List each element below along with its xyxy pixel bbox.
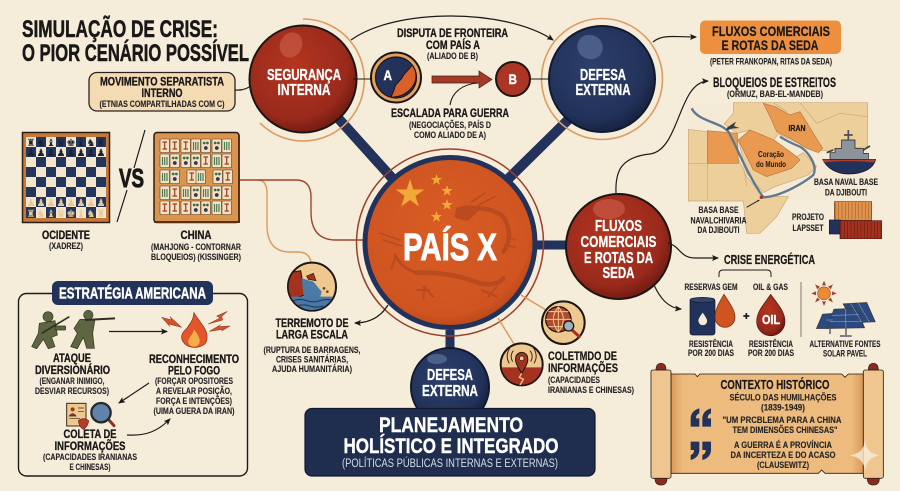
- icon: globo: [542, 301, 585, 344]
- node: fluxos comerciais: E ROTAS DA: [584, 250, 653, 267]
- text: terremoto: (RUPTURA DE BARRAGENS,: [264, 345, 360, 355]
- icon: document and magnifier: [67, 403, 114, 429]
- icon: sun and solar panels: [811, 281, 875, 336]
- mahjong board: [154, 132, 239, 222]
- map labels: PROJETO: [792, 212, 824, 222]
- containers: [829, 202, 882, 239]
- text: escalada para guerra: COMO ALIADO DE A): [414, 130, 486, 140]
- map labels: LAPSSET: [792, 223, 824, 233]
- callout: movimento separatista: INTERNO: [142, 88, 183, 100]
- scroll: contexto histórico: CONTEXTO HISTÓRICO: [720, 377, 830, 392]
- text: reconhecimento pelo fogo: RECONHECIMENTO: [149, 354, 239, 366]
- arrow: fluxos to reservas: [654, 285, 681, 309]
- text: coleta de informações: INFORMAÇÕES: [548, 360, 618, 375]
- node: fluxos comerciais: COMERCIAIS: [580, 234, 657, 251]
- arrow: reconhecimento to coleta: [119, 383, 149, 403]
- text: coleta de informações: [548, 349, 634, 395]
- text: ataque diversionário: DESVIAR RECURSOS): [35, 386, 109, 396]
- text: reconhecimento pelo fogo: (UIMA GUERA DA IRAN): [154, 406, 235, 416]
- icon: soldiers: [32, 310, 115, 349]
- node: fluxos comerciais: [566, 194, 671, 299]
- energy reserves: POR 200 DIAS: [748, 348, 794, 358]
- text: coleta de informações: COLETMDO DE: [548, 349, 617, 363]
- panel: estratégia americana: [18, 281, 248, 476]
- text: reconhecimento pelo fogo: FORÇA E INTENÇÕES): [156, 396, 232, 406]
- node: fluxos comerciais: SEDA: [602, 265, 635, 282]
- label: china: BLOQUEIOS) (KISSINGER): [151, 252, 241, 262]
- map labels: BASA BASE: [698, 205, 739, 215]
- text: disputa de fronteira: [397, 28, 508, 61]
- text: coleta de informações panel: INFORMAÇÕES: [54, 440, 126, 453]
- map: middle east: [688, 103, 882, 239]
- text: ataque diversionário: ATAQUE: [53, 353, 91, 365]
- label: ocidente: [42, 230, 90, 251]
- text: bloqueios de estreitos: (ORMUZ, BAB-EL-MANDEB): [727, 89, 823, 99]
- text: terremoto: CRISES SANITÁRIAS,: [276, 354, 348, 364]
- text: reconhecimento pelo fogo: [149, 354, 239, 416]
- text: escalada para guerra: ESCALADA PARA GUERRA: [391, 108, 509, 120]
- text: coleta de informações panel: COLETA DE: [64, 429, 117, 441]
- text: terremoto: TERREMOTO DE: [276, 318, 349, 330]
- banner: planejamento holístico: (POLÍTICAS PÚBLICAS INTERNAS E EXTERNAS): [342, 457, 558, 470]
- icon: terremoto barragem: [287, 263, 340, 313]
- energy reserves: [684, 270, 801, 358]
- text: terremoto: AJUDA HUMANITÁRIA): [272, 364, 352, 374]
- central node: país x: [356, 149, 544, 336]
- title: O PIOR CENÁRIO POSSÍVEL: [22, 39, 249, 67]
- heading badge: [52, 281, 213, 305]
- text: disputa de fronteira: COM PAÍS A: [426, 39, 480, 52]
- text: ataque diversionário: [35, 353, 110, 396]
- node: segurança interna: SEGURANÇA: [267, 67, 341, 84]
- title: SIMULAÇÃO DE CRISE:: [22, 15, 218, 43]
- map labels: NAVALCHIVARIA: [690, 216, 747, 226]
- text: coleta de informações panel: (CAPACIDADES IRANIANAS: [43, 452, 137, 462]
- node: defesa externa bottom: [411, 348, 489, 426]
- country a and b with arrow: [353, 52, 551, 105]
- node: segurança interna: [250, 19, 364, 141]
- energy reserves: RESISTÊNCIA: [689, 338, 733, 349]
- callout: movimento separatista: [89, 72, 253, 111]
- map labels: DA DJIBOUTI: [825, 188, 867, 198]
- callout: movimento separatista: (ETNIAS COMPARTILHADAS COM C): [100, 99, 225, 109]
- banner: planejamento holístico: [305, 408, 595, 476]
- node: defesa externa bottom: EXTERNA: [422, 383, 478, 400]
- node: segurança interna: INTERNA: [278, 82, 331, 99]
- map labels: IRAN: [788, 123, 806, 133]
- icon: fire: [162, 311, 230, 347]
- label: china: [151, 230, 242, 262]
- scroll: contexto histórico: A GUERRA É A PROVÍNCIA: [734, 440, 833, 450]
- text: disputa de fronteira: (ALIADO DE B): [427, 51, 478, 61]
- arrow: fluxos to bloqueios: [616, 81, 708, 193]
- scroll: contexto histórico: (1839-1949): [761, 402, 805, 412]
- orange links to icons: [498, 295, 546, 344]
- ship: [823, 130, 876, 174]
- energy reserves: OIL & GAS: [753, 282, 788, 292]
- map labels: [690, 123, 878, 235]
- text: bloqueios de estreitos: BLOQUEIOS DE ESTREITOS: [713, 75, 836, 90]
- connector lines: mahjong to centre: [240, 180, 368, 262]
- label: china: CHINA: [180, 230, 212, 242]
- scroll: contexto histórico: TEM DIMENSÕES CHINESAS": [732, 425, 838, 435]
- chess board: ♟♟♟♟♟♟♟♟: [26, 148, 105, 159]
- node: defesa externa bottom: DEFESA: [427, 367, 473, 384]
- energy reserves: POR 200 DIAS: [688, 348, 734, 358]
- node: defesa externa: EXTERNA: [576, 82, 631, 99]
- callout: movimento separatista: MOVIMENTO SEPARATISTA: [100, 76, 224, 88]
- chess board: ♟♟♟♟♟♟♟♟: [26, 198, 105, 209]
- text: disputa de fronteira: DISPUTA DE FRONTEIRA: [397, 28, 508, 40]
- node: defesa externa: DEFESA: [580, 67, 626, 84]
- heading badge: ESTRATÉGIA AMERICANA: [59, 284, 206, 302]
- text: fontes alternativas: [810, 339, 881, 358]
- flag stars: [396, 174, 453, 222]
- text: ataque diversionário: (ENGANAR INIMIGO,: [40, 376, 104, 386]
- energy reserves: RESISTÊNCIA: [749, 338, 793, 349]
- energy reserves: OIL: [762, 312, 780, 327]
- text: coleta de informações: (CAPACIDADES: [548, 375, 600, 385]
- map labels: DA DJIBOUTI: [698, 225, 740, 235]
- banner: planejamento holístico: HOLÍSTICO E INTEGRADO: [344, 435, 558, 458]
- map labels: do Mundo: [756, 160, 786, 169]
- country a and b with arrow: B: [508, 71, 517, 87]
- arrow: ataque to reconhecimento: [109, 330, 167, 332]
- map labels: BASA NAVAL BASE: [814, 177, 878, 187]
- navy spokes: [338, 118, 572, 352]
- banner: planejamento holístico: PLANEJAMENTO: [379, 414, 523, 437]
- scroll: contexto histórico: SÉCULO DAS HUMILHAÇÕES: [730, 392, 837, 402]
- vs divider: VS: [119, 163, 144, 193]
- text: coleta de informações: IRANIANAS E CHINESAS): [548, 385, 634, 395]
- arrow: to terremoto: [355, 305, 388, 323]
- title: [22, 15, 249, 67]
- text: reconhecimento pelo fogo: (FORÇAR OPOSITORES: [155, 376, 233, 386]
- scroll: contexto histórico: DA INCERTEZA E DO ACASO: [730, 450, 836, 460]
- chess board: ♜♞♝♛♚♝♞♜: [26, 209, 105, 220]
- scroll: contexto histórico: (CLAUSEWITZ): [757, 460, 809, 470]
- chess board: ♜♞♝♛♚♝♞♜: [26, 138, 105, 149]
- text: escalada para guerra: (NEGOCIAÇÕES, PAÍS D: [409, 120, 491, 130]
- box: fluxos comerciais: FLUXOS COMERCIAIS: [712, 23, 830, 39]
- text: coleta de informações panel: E CHINESAS): [70, 462, 111, 472]
- text: escalada para guerra: [391, 108, 509, 140]
- arrow: coleta to reconhecimento: [127, 419, 170, 435]
- arrow: defesa to fluxos box: [653, 36, 696, 42]
- text: terremoto: LARGA ESCALA: [276, 330, 348, 342]
- energy reserves: RESERVAS GEM: [684, 282, 738, 292]
- node: defesa externa: [542, 18, 662, 140]
- text: reconhecimento pelo fogo: A REVELAR POSIÇÃO,: [156, 386, 232, 396]
- icon: pino de localização: [500, 343, 543, 387]
- node: fluxos comerciais: FLUXOS: [595, 218, 642, 235]
- label: ocidente: OCIDENTE: [42, 230, 90, 242]
- arrow: fluxos to crise energética: [668, 243, 718, 258]
- map labels: Coração: [758, 150, 784, 159]
- dragon: [380, 193, 515, 298]
- label: china: (MAHJONG - CONTORNAR: [151, 242, 242, 252]
- vs divider: [117, 130, 145, 222]
- country a and b with arrow: A: [384, 67, 392, 83]
- text: ataque diversionário: DIVERSIONÁRIO: [35, 364, 110, 377]
- text: coleta de informações panel: [43, 429, 137, 472]
- text: peter frankopan: (PETER FRANKOPAN, RITAS DA SEDA): [710, 56, 832, 66]
- central node: país x: PAÍS X: [403, 225, 497, 269]
- arc arrow: disputa de fronteira: [351, 16, 553, 40]
- chess board: [22, 132, 110, 222]
- scroll: contexto histórico: [651, 363, 883, 485]
- box: fluxos comerciais: E ROTAS DA SEDA: [722, 37, 818, 53]
- heading: crise energética: CRISE ENERGÉTICA: [724, 252, 815, 267]
- scroll: contexto histórico: "UM PRCBLEMA PARA A CHINA: [722, 415, 842, 425]
- text: reconhecimento pelo fogo: PELO FOGO: [168, 366, 220, 378]
- text: fontes alternativas: SOLAR PAVEL: [823, 348, 867, 358]
- text: bloqueios de estreitos: [713, 75, 836, 99]
- text: terremoto: [264, 318, 360, 374]
- label: ocidente: (XADREZ): [49, 241, 83, 251]
- box: fluxos comerciais: [700, 20, 841, 54]
